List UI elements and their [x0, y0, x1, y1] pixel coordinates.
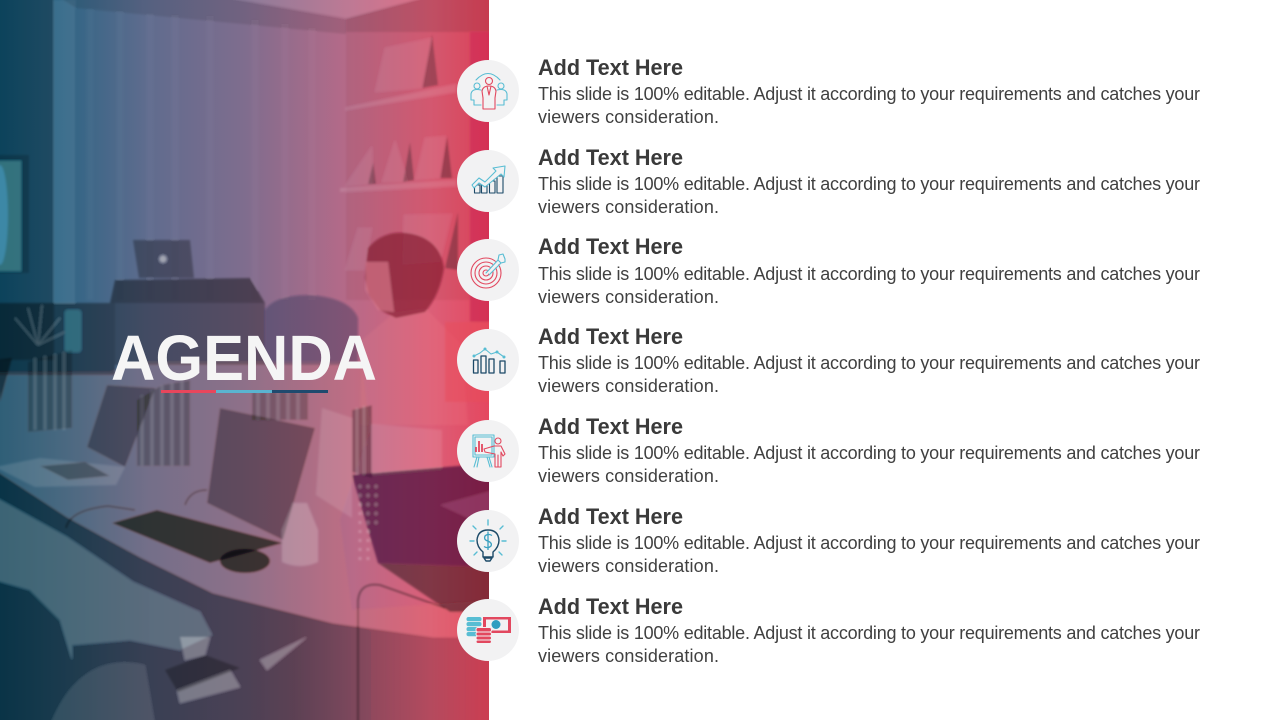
plastic bottle	[282, 503, 318, 566]
black table	[110, 278, 265, 303]
curtain with slats	[54, 0, 312, 304]
laptop cord	[358, 585, 445, 720]
under desk shadow	[0, 470, 494, 720]
agenda item 5	[457, 414, 1200, 486]
body text: viewers consideration.	[538, 376, 719, 396]
icon: target with dart	[457, 239, 519, 301]
laptop two	[112, 408, 315, 563]
right lower wall	[446, 322, 468, 402]
dark left wall	[0, 0, 54, 360]
heading: Add Text Here	[538, 145, 683, 170]
mouse	[220, 549, 270, 573]
body text: viewers consideration.	[538, 646, 719, 666]
water bottle	[65, 310, 81, 352]
title underline	[161, 390, 328, 393]
booklet	[316, 408, 352, 518]
plant	[15, 305, 65, 345]
body text: This slide is 100% editable. Adjust it according to your requirements and catches your	[538, 174, 1200, 194]
body text	[538, 353, 1200, 396]
panel: gradient photo of office meeting	[0, 0, 495, 720]
heading: Add Text Here	[538, 55, 683, 80]
body text	[538, 84, 1200, 127]
agenda item 1	[457, 55, 1200, 127]
body text: This slide is 100% editable. Adjust it according to your requirements and catches your	[538, 84, 1200, 104]
sock and shoes	[177, 637, 307, 703]
icon: team leader	[457, 60, 519, 122]
shopping bags	[28, 350, 442, 478]
body text: viewers consideration.	[538, 197, 719, 217]
body text: viewers consideration.	[538, 107, 719, 127]
heading: Add Text Here	[538, 594, 683, 619]
icon: coins and cash	[457, 599, 519, 661]
body text: This slide is 100% editable. Adjust it according to your requirements and catches your	[538, 533, 1200, 553]
shelf art	[340, 34, 458, 270]
icon: presenter at board	[457, 420, 519, 482]
body text	[538, 533, 1200, 576]
laptop back	[133, 240, 194, 278]
man shirt	[360, 308, 468, 425]
ceiling band	[55, 0, 346, 34]
heading: Add Text Here	[538, 504, 683, 529]
seated leg	[0, 497, 212, 660]
body text: This slide is 100% editable. Adjust it according to your requirements and catches your	[538, 623, 1200, 643]
heading: Add Text Here	[538, 324, 683, 349]
laptop one	[0, 385, 155, 487]
wall monitor	[0, 155, 29, 273]
body text	[538, 443, 1200, 486]
heading: Add Text Here	[538, 414, 683, 439]
icon: dollar light bulb	[457, 510, 519, 572]
left laptop edge	[0, 358, 12, 402]
body text: This slide is 100% editable. Adjust it according to your requirements and catches your	[538, 443, 1200, 463]
body text: This slide is 100% editable. Adjust it according to your requirements and catches your	[538, 264, 1200, 284]
agenda item 4	[457, 324, 1200, 396]
agenda item 3	[457, 234, 1200, 307]
chair	[265, 295, 358, 365]
title: AGENDA: AGENDA	[111, 322, 377, 394]
ceiling	[215, 0, 432, 18]
body text: viewers consideration.	[538, 466, 719, 486]
agenda item 6	[457, 504, 1200, 576]
body text: viewers consideration.	[538, 287, 719, 307]
agenda item 2	[457, 145, 1200, 217]
agenda item 7	[457, 594, 1200, 666]
chair bottom	[50, 662, 155, 720]
body text	[538, 174, 1200, 217]
body text: This slide is 100% editable. Adjust it according to your requirements and catches your	[538, 353, 1200, 373]
lower back wall	[0, 303, 115, 375]
laptop three	[352, 463, 494, 612]
desk cable	[66, 490, 207, 528]
icon: growth chart	[457, 150, 519, 212]
dark red pillar	[470, 32, 489, 322]
icon: bars with line	[457, 329, 519, 391]
man head	[365, 233, 444, 318]
body text	[538, 623, 1200, 666]
desk surface	[0, 362, 494, 637]
body text	[538, 264, 1200, 307]
upper right wall	[346, 0, 494, 300]
body text: viewers consideration.	[538, 556, 719, 576]
heading: Add Text Here	[538, 234, 683, 259]
